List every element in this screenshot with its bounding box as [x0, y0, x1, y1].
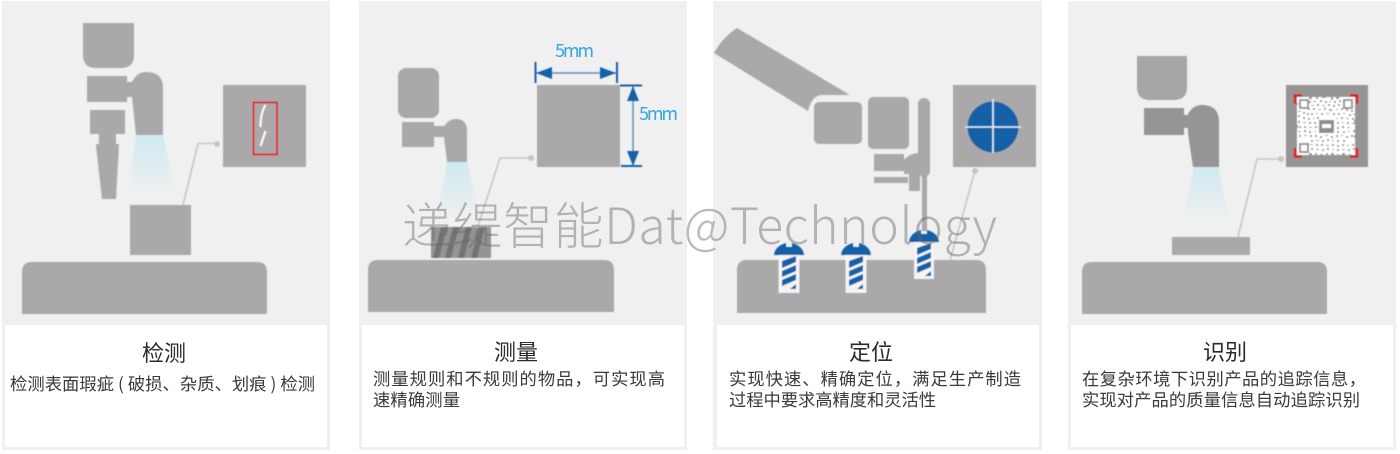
description: positioning: 过程中要求高精度和灵活性	[729, 386, 936, 411]
panel: identification	[1068, 1, 1396, 450]
icon: screw 2	[841, 243, 871, 293]
dimension: height arrow	[620, 86, 642, 166]
watermark: 递缇智能Dat@Technology	[402, 187, 997, 259]
caption card: detection	[5, 325, 327, 447]
caption card: identification	[1071, 325, 1393, 447]
label: height 5mm: 5mm	[639, 100, 678, 126]
inset: QR code with red scan corners	[1286, 85, 1368, 167]
illustration: detection robot arm and part	[22, 23, 306, 314]
dimension: width arrow	[536, 62, 617, 83]
icon: screw 3	[909, 230, 939, 279]
description: measurement: 测量规则和不规则的物品，可实现高	[373, 365, 665, 390]
description: detection: 检测表面瑕疵 ( 破损、杂质、划痕 ) 检测	[10, 370, 315, 395]
icon: screw 1	[774, 243, 804, 293]
heading: measurement: 测量	[494, 335, 538, 367]
description: identification: 实现对产品的质量信息自动追踪识别	[1082, 386, 1360, 411]
description: measurement: 速精确测量	[373, 386, 460, 411]
description: measurement	[373, 365, 665, 411]
caption card: measurement	[362, 325, 684, 447]
illustration: identification robot arm and part	[1082, 56, 1327, 314]
inset: screw head top view	[953, 85, 1036, 167]
heading: detection: 检测	[142, 336, 186, 368]
panel: measurement	[359, 1, 687, 450]
description: identification: 在复杂环境下识别产品的追踪信息，	[1082, 365, 1366, 390]
heading: positioning: 定位	[849, 335, 893, 367]
description: positioning: 实现快速、精确定位，满足生产制造	[729, 365, 1021, 390]
description: identification	[1082, 365, 1366, 411]
description: positioning	[729, 365, 1021, 411]
label: width 5mm: 5mm	[555, 37, 594, 63]
heading: identification: 识别	[1203, 335, 1247, 367]
panel: positioning	[713, 1, 1042, 450]
illustration: positioning robot arm	[714, 28, 986, 313]
caption card: positioning	[717, 325, 1039, 447]
illustration: measurement robot arm and part	[368, 68, 620, 312]
panel: detection	[2, 1, 330, 450]
